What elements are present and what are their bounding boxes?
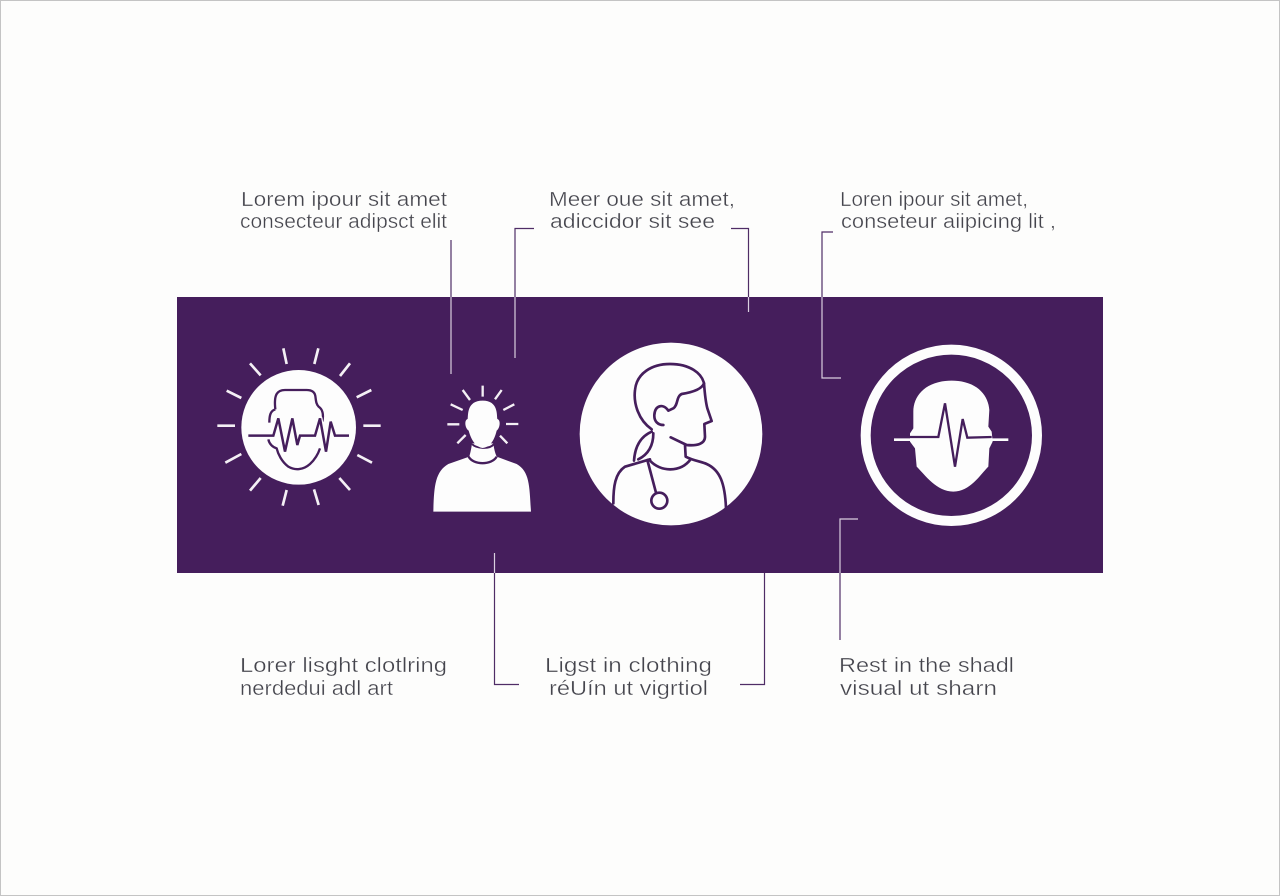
callout: top left text: consecteur adipsct elit (240, 210, 447, 233)
callout: top centre text (549, 188, 735, 233)
callout: top centre text: Meer oue sit amet, (549, 188, 735, 211)
icon: person with radiating head (433, 386, 531, 512)
leader lines inside panel (451, 297, 858, 573)
callout: top centre text: adiccidor sit see (550, 210, 715, 233)
callout: bottom left text: nerdedui adl art (240, 677, 393, 700)
callout: bottom right text (839, 654, 1014, 700)
callout: top right text (840, 188, 1056, 233)
callout: top left text: Lorem ipour sit amet (241, 188, 447, 211)
callout: bottom left text: Lorer lisght clotlring (240, 654, 447, 677)
panel: purple band (177, 297, 1103, 573)
callout: bottom centre text (545, 654, 712, 700)
callout: bottom right text: Rest in the shadl (839, 654, 1014, 677)
callout: bottom left text (240, 654, 447, 700)
leader lines outside panel (451, 228, 840, 684)
callout: top right text: conseteur aiipicing lit , (841, 210, 1056, 233)
icon: profile of medic with stethoscope (580, 343, 762, 525)
callout: bottom right text: visual ut sharn (840, 677, 997, 700)
callout: top right text: Loren ipour sit amet, (840, 188, 1028, 211)
icon: head with pulse in glowing circle (217, 348, 381, 506)
callout: top left text (240, 188, 447, 233)
callout: bottom centre text: réUín ut vigrtiol (549, 677, 708, 700)
icon: head with pulse in ring (866, 350, 1037, 521)
callout: bottom centre text: Ligst in clothing (545, 654, 712, 677)
